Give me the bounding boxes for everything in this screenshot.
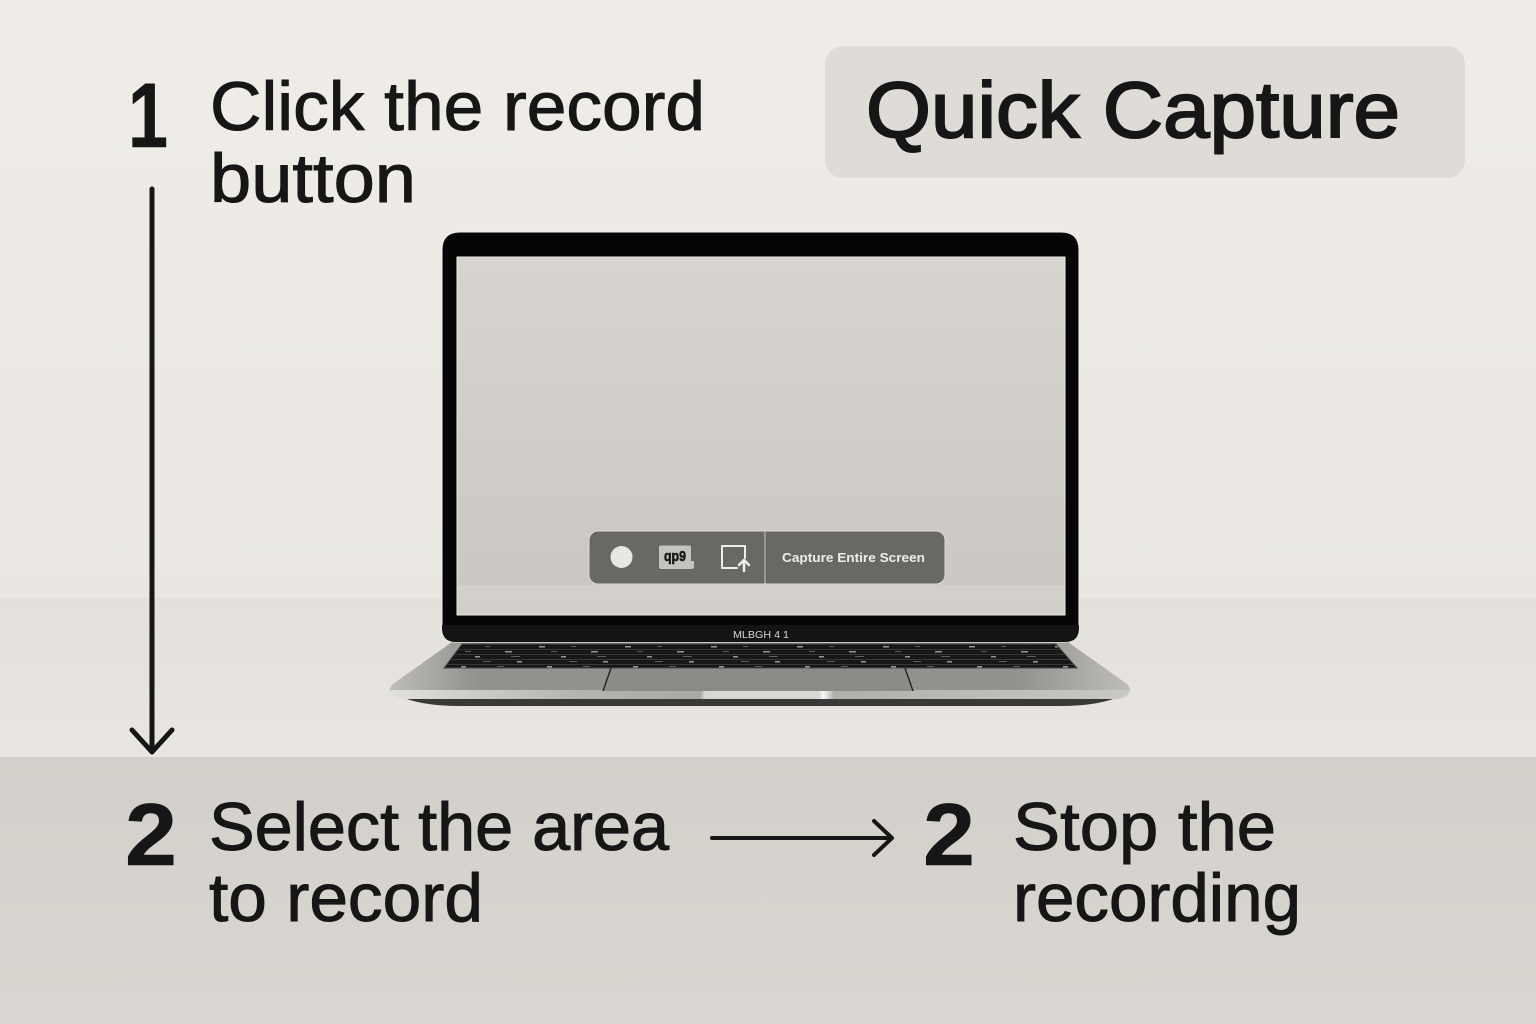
title badge: Quick Capture bbox=[866, 65, 1400, 154]
trackpad bbox=[603, 668, 913, 691]
step 3 text bbox=[1013, 789, 1301, 936]
step 1 text: button bbox=[210, 140, 416, 217]
laptop lid bbox=[442, 232, 1079, 642]
title badge bbox=[825, 46, 1465, 178]
desk surface bbox=[0, 598, 1536, 758]
capture toolbar bbox=[589, 531, 945, 584]
arrow: step 2 to step 3 bbox=[712, 821, 892, 855]
laptop shadow bbox=[404, 698, 1116, 706]
step 1 text bbox=[210, 68, 705, 217]
step 1 number: 1 bbox=[128, 65, 168, 167]
window icon bbox=[659, 546, 694, 569]
step 2 text bbox=[209, 789, 669, 936]
keyboard bbox=[444, 644, 1077, 668]
step 2 text: Select the area bbox=[209, 789, 669, 865]
step 1 text: Click the record bbox=[210, 68, 705, 145]
laptop base bbox=[390, 642, 1130, 699]
desk reflection on screen bbox=[458, 585, 1064, 614]
step 2 number: 2 bbox=[125, 785, 177, 884]
record button icon bbox=[610, 546, 632, 568]
laptop model label: MLBGH 4 1 bbox=[733, 629, 789, 641]
selection icon bbox=[722, 546, 749, 571]
step 3 number: 2 bbox=[923, 785, 975, 884]
front ledge bbox=[0, 757, 1536, 1024]
step 3 text: recording bbox=[1013, 860, 1301, 936]
toolbar label: Capture Entire Screen bbox=[782, 550, 925, 565]
background wall bbox=[0, 0, 1536, 600]
arrow: step 1 down to step 2 bbox=[132, 189, 172, 752]
toolbar divider bbox=[764, 532, 766, 584]
screen bbox=[457, 257, 1065, 615]
laptop bbox=[390, 232, 1130, 706]
step 3 text: Stop the bbox=[1013, 789, 1276, 865]
window icon: qp9 bbox=[664, 548, 686, 565]
lid chin bbox=[442, 625, 1079, 642]
step 2 text: to record bbox=[209, 860, 483, 936]
